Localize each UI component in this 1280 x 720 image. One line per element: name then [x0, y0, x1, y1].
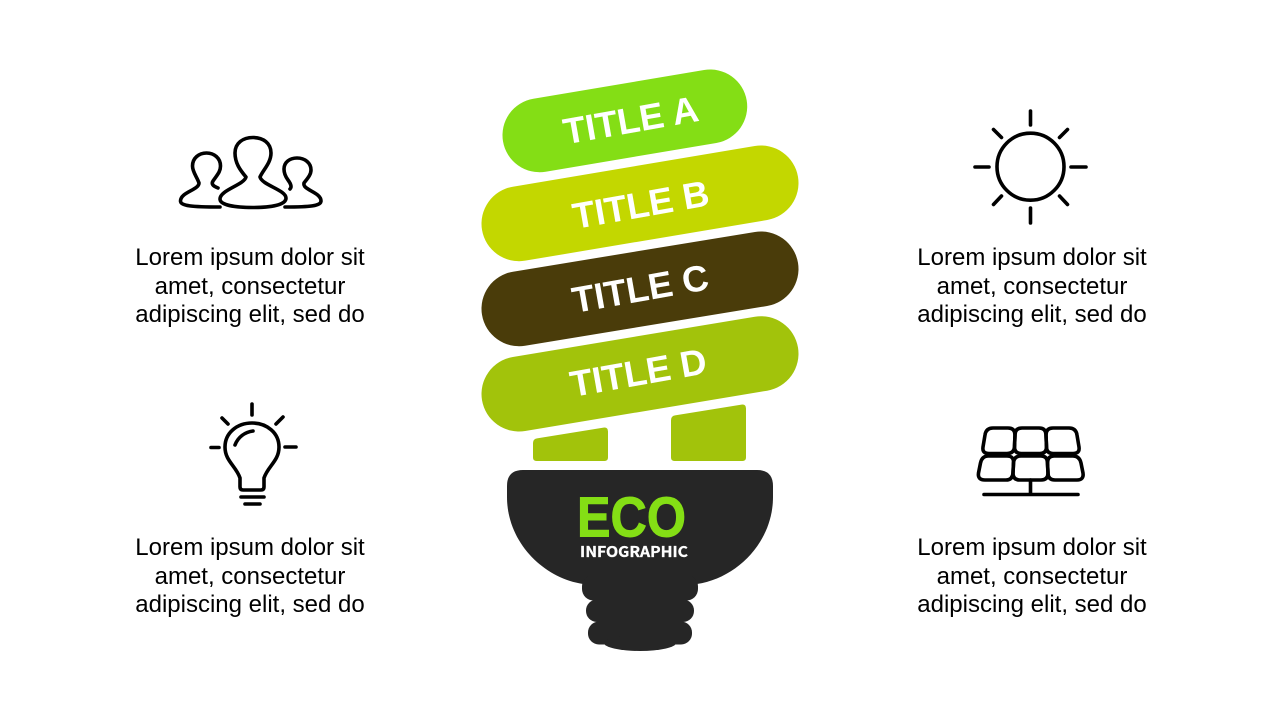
text block: amet, consectetur	[937, 563, 1127, 590]
icon: people	[180, 138, 321, 208]
panel: bulb	[507, 88, 773, 651]
spiral band: title D: TITLE D	[567, 341, 710, 405]
text block: amet, consectetur	[937, 273, 1127, 300]
panel: energy idea	[135, 404, 365, 618]
text block: Lorem ipsum dolor sit	[917, 244, 1147, 271]
panel: solar energy	[917, 111, 1147, 328]
panel: solar panels	[917, 428, 1147, 618]
text block: Lorem ipsum dolor sit	[917, 534, 1147, 561]
eco label: INFOGRAPHIC	[580, 541, 688, 562]
spiral band: title A: TITLE A	[560, 88, 702, 152]
bulb stem: right foot	[671, 405, 746, 461]
text block: amet, consectetur	[155, 563, 345, 590]
eco label: ECO	[577, 486, 686, 550]
icon: light bulb	[211, 404, 296, 504]
spiral band: title B	[519, 173, 761, 237]
text block: Lorem ipsum dolor sit	[135, 244, 365, 271]
bulb base	[507, 470, 773, 651]
spiral band: title D	[519, 341, 761, 405]
text block: amet, consectetur	[155, 273, 345, 300]
icon: solar panel	[978, 428, 1083, 494]
text block: adipiscing elit, sed do	[917, 301, 1147, 328]
icon: sun	[975, 111, 1086, 223]
text block: adipiscing elit, sed do	[135, 591, 365, 618]
spiral band: title C	[519, 257, 761, 321]
spiral band: title B: TITLE B	[569, 173, 712, 237]
panel: community	[135, 138, 365, 328]
text block: adipiscing elit, sed do	[135, 301, 365, 328]
spiral band: title C: TITLE C	[569, 257, 712, 321]
bulb stem: left foot	[533, 428, 608, 461]
text block: Lorem ipsum dolor sit	[135, 534, 365, 561]
text block: adipiscing elit, sed do	[917, 591, 1147, 618]
